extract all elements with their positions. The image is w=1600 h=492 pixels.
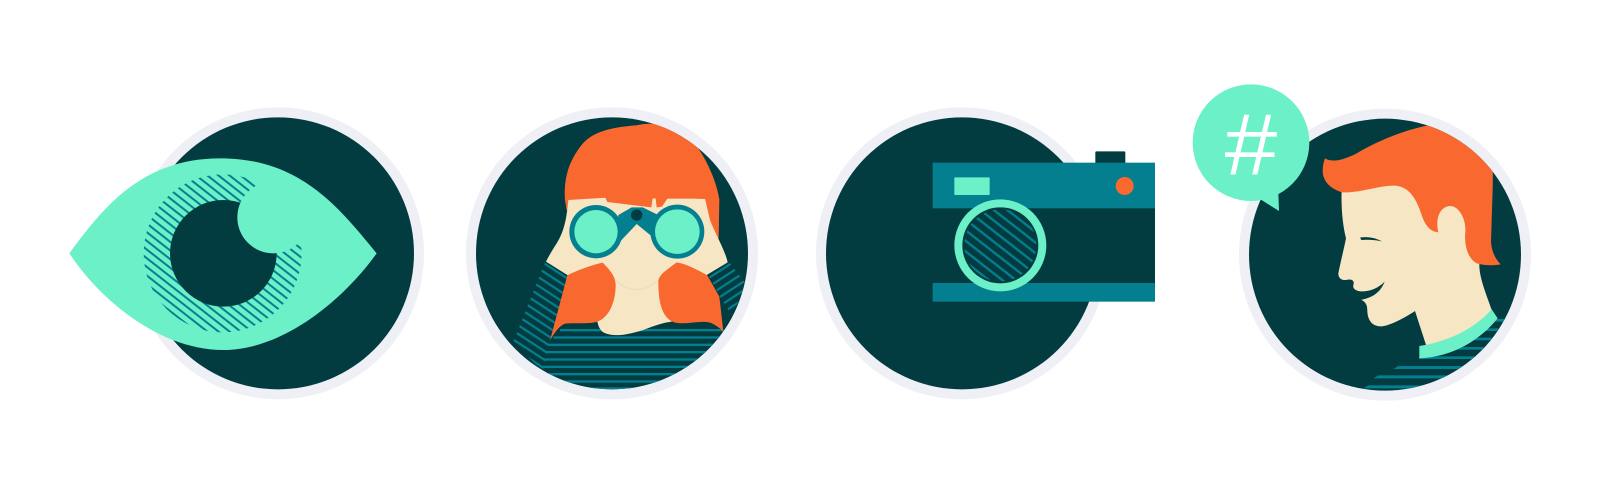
left lens glass <box>574 210 618 253</box>
left braid <box>550 263 616 341</box>
right lens <box>650 205 704 259</box>
camera top band <box>933 163 1155 208</box>
lens dark glass <box>962 207 1038 283</box>
lens stripes <box>964 209 1036 281</box>
eye shape <box>69 158 377 350</box>
smile <box>1358 282 1385 300</box>
camera bottom band <box>933 283 1155 302</box>
man icon dark disc <box>1249 119 1521 391</box>
camera icon ring <box>816 107 1108 399</box>
left sleeve stripes <box>513 263 567 372</box>
icon: eye <box>69 107 424 399</box>
shirt stripes <box>1363 319 1505 388</box>
eye icon dark disc <box>142 117 414 389</box>
back hair <box>565 124 719 238</box>
icon: girl with binoculars <box>466 107 758 399</box>
viewfinder <box>954 177 990 195</box>
striped iris <box>144 174 302 332</box>
hashtag: # <box>1225 95 1278 193</box>
fringe <box>565 124 719 207</box>
focus knob <box>631 209 642 221</box>
binocular bridge <box>618 207 658 243</box>
face and hands <box>546 198 728 335</box>
chest stripes <box>540 329 723 389</box>
face and neck <box>1338 183 1494 350</box>
icon: camera <box>816 107 1155 399</box>
right lens glass <box>655 209 700 254</box>
hair <box>1323 125 1501 265</box>
speech bubble <box>1193 84 1309 211</box>
pupil highlight <box>237 181 309 253</box>
chin line <box>616 280 657 289</box>
binoculars <box>569 205 704 259</box>
icon: man with hashtag bubble <box>1193 84 1531 401</box>
girl icon ring <box>466 107 758 399</box>
camera icon dark disc <box>826 117 1098 389</box>
bubble circle <box>1193 84 1309 201</box>
indicator light <box>1116 177 1134 195</box>
lens rim <box>954 199 1046 291</box>
figure <box>513 124 747 389</box>
right sleeve stripes <box>708 262 747 315</box>
pupil <box>170 200 277 307</box>
bubble tail <box>1260 193 1279 211</box>
eye icon ring <box>132 107 424 399</box>
man figure <box>1323 125 1505 388</box>
camera body <box>933 207 1155 285</box>
closed eye <box>1360 237 1382 241</box>
man icon ring <box>1239 109 1531 401</box>
shutter button <box>1095 151 1125 163</box>
left lens <box>569 205 623 258</box>
girl icon dark disc <box>476 117 748 389</box>
collar <box>1419 309 1498 358</box>
right braid <box>658 262 723 332</box>
